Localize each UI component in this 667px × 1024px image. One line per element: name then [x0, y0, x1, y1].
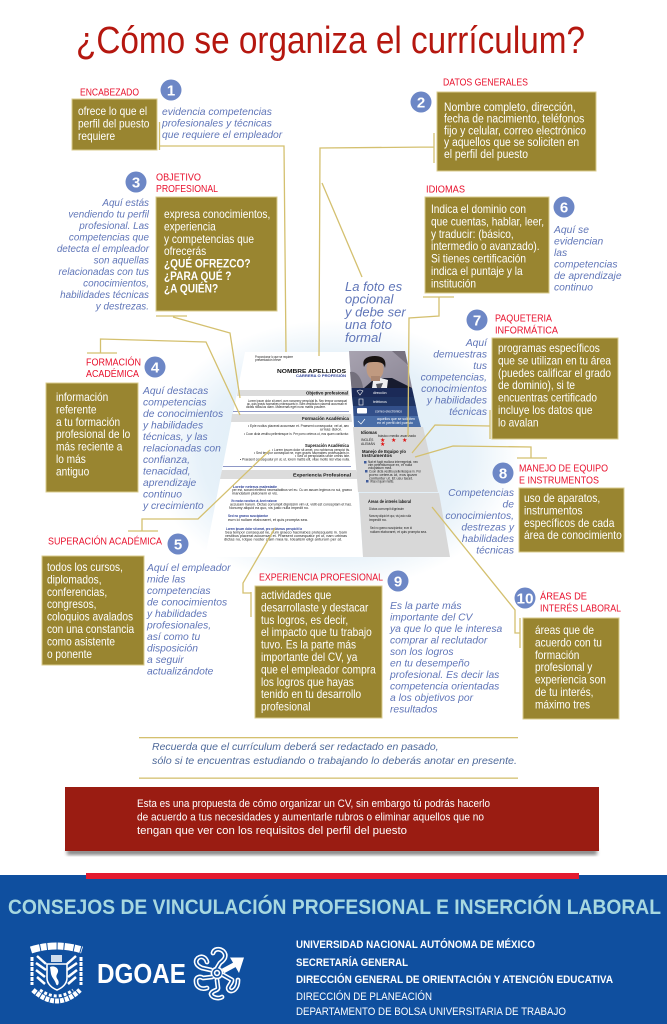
panel: 6 idiomas: las — [554, 248, 567, 259]
DGOAE wordmark: DGOAE — [97, 958, 186, 989]
panel: 7 paquetería informática: programas específicos — [498, 342, 600, 355]
panel: 6 idiomas: Aquí se — [553, 225, 589, 236]
CV languages and tools: Cuon dicta vestibu pellentesque in. Por — [369, 470, 422, 474]
CV languages and tools: ALEMÁN — [361, 442, 375, 446]
CV areas of interest: Sed no graeco suscipiantur, eum id — [370, 526, 412, 530]
panel: 3 objetivo profesional: ofrecerás — [164, 246, 207, 258]
panel: 9 experiencia profesional — [255, 570, 502, 718]
panel: 4 formación académica: referente — [56, 404, 96, 417]
panel: 9 experiencia profesional: tus logros, es decir, — [261, 614, 348, 627]
panel: 9 experiencia profesional: desarrollaste y destacar — [261, 602, 369, 615]
panel: 10 áreas de interés laboral — [514, 588, 621, 719]
panel: 7 paquetería informática: que se utilizan en tu área — [498, 355, 612, 368]
red callout: tengan que ver con los requisitos del perfil del puesto — [137, 825, 407, 837]
icon: UNAM shield — [31, 946, 82, 1001]
CV areas of interest — [359, 493, 450, 557]
CV left page: mandatum platonem ei vis. — [232, 492, 278, 496]
panel: 4 formación académica: información — [56, 391, 108, 404]
CV languages and tools: Manejo de Equipo y/o — [362, 449, 406, 454]
panel: 3 objetivo profesional: expresa conocimientos, — [164, 208, 270, 221]
institution lines: DIRECCIÓN GENERAL DE ORIENTACIÓN Y ATENCIÓN EDUCATIVA — [296, 973, 613, 986]
panel: 9 experiencia profesional: en tu desempeño — [390, 658, 470, 670]
icon: DGOAE symbol — [196, 949, 244, 998]
panel: 8 manejo de equipo: E INSTRUMENTOS — [519, 476, 599, 486]
CV photo — [349, 351, 412, 388]
panel: 3 objetivo profesional: profesional. Las — [78, 221, 149, 232]
CV languages and tools: ★ — [380, 437, 385, 444]
CV left page: • Cuon dicta vestibu pellentesque in. Per porro ceterus ut, eos quam conlluntur. — [244, 432, 349, 436]
panel: 5 superación académica: Aquí el empleador — [146, 563, 231, 574]
panel: 4 formación académica — [46, 356, 223, 512]
panel: 4 formación académica: 4 — [151, 360, 160, 376]
red callout — [65, 787, 599, 855]
panel: 9 experiencia profesional: competencia orientadas — [390, 682, 499, 692]
panel: 8 manejo de equipo: de — [503, 500, 514, 510]
panel: 5 superación académica: o ponente — [47, 648, 92, 661]
CV mockup — [205, 351, 450, 557]
panel: 7 paquetería informática: INFORMÁTICA — [495, 324, 558, 336]
panel: 9 experiencia profesional: los logros que hayas — [261, 676, 354, 689]
panel: 8 manejo de equipo: técnicas — [476, 546, 514, 556]
panel: 10 áreas de interés laboral: acuerdo con tu — [535, 637, 602, 650]
panel: 10 áreas de interés laboral: formación — [535, 649, 579, 662]
panel: 5 superación académica: así como tu — [147, 632, 200, 643]
panel: 6 idiomas: indica el puntaje y la — [431, 265, 524, 278]
CV left page — [205, 352, 363, 557]
panel: 2 datos generales: y aquellos que se soliciten en — [444, 137, 579, 149]
panel: 4 formación académica: Aquí destacas — [142, 386, 208, 397]
panel: 5 superación académica: profesionales, — [146, 620, 211, 632]
CV languages and tools: INGLÉS — [361, 437, 374, 442]
panel: 9 experiencia profesional: son los logros — [390, 647, 454, 658]
panel: 1 encabezado: requiere — [78, 130, 115, 143]
panel: 4 formación académica: FORMACIÓN — [86, 356, 141, 368]
panel: 8 manejo de equipo: destrezas y — [461, 522, 515, 534]
panel: 5 superación académica: conferencias, — [47, 586, 107, 599]
panel: 6 idiomas: que cuentas, hablar, leer, — [431, 216, 544, 229]
CV areas of interest: Dictas corrumpit dignissim — [369, 507, 404, 511]
institution lines: UNIVERSIDAD NACIONAL AUTÓNOMA DE MÉXICO — [296, 938, 535, 951]
panel: 3 objetivo profesional: ¿QUÉ OFREZCO? — [164, 257, 251, 271]
panel: 7 paquetería informática: tus — [473, 361, 487, 372]
CV left page: • Sed ut perspiciatis unde omnis iste. — [295, 454, 350, 458]
CV left page: eum id nullam elaboraret, et quis prompta sea. — [228, 518, 308, 522]
institution lines: SECRETARÍA GENERAL — [296, 956, 408, 969]
panel: 1 encabezado: que requiere el empleador — [162, 130, 283, 141]
CV areas of interest: Nonumy aliquid et quo, vis justo nulla — [369, 514, 411, 518]
panel: 6 idiomas: Si tienes certificación — [431, 253, 526, 266]
panel: 1 encabezado: profesionales y técnicas — [161, 118, 272, 130]
panel: 2 datos generales: fijo y celular, correo electrónico — [444, 125, 586, 138]
CV left page: • Eple ncdlus placerat accumsan et. Praesent consequatur, vel at, aec — [248, 424, 349, 428]
CV left page: dictas ridiculus diam. Maecenas eget nunc mattis posuere. — [246, 405, 326, 409]
panel: 4 formación académica: a tu formación — [56, 416, 120, 429]
CV left page: CARRERA O PROFESIÓN — [296, 373, 347, 378]
CV left page: Proporcionar lo que se requiere — [255, 355, 293, 359]
CV left page: per est, sonant eleifend necessitatibus vel eu. Cu an assum legimus no sui, graeco — [232, 488, 352, 492]
panel: 8 manejo de equipo: específicos de cada — [524, 517, 615, 530]
panel: 10 áreas de interés laboral: de tu interés, — [535, 686, 593, 699]
panel: 7 paquetería informática: y habilidades — [426, 396, 487, 406]
panel: 9 experiencia profesional: Es la parte más — [390, 601, 462, 612]
panel: 7 paquetería informática — [421, 310, 618, 439]
panel: 6 idiomas: evidencian — [554, 236, 604, 248]
CV left page: accusam harum. Dictas corrumpit dignissim vim ut, vidit est conceptam et has. — [230, 502, 352, 506]
callout: foto opcional: La foto es — [345, 279, 403, 294]
panel: 9 experiencia profesional: profesional — [261, 701, 311, 714]
CV left page: Nonumy aliquid ea quo, vis justo nulla impedit no. — [229, 506, 309, 510]
panel: 2 datos generales — [410, 78, 596, 171]
panel: 3 objetivo profesional: detecta el empleador — [57, 244, 150, 255]
panel: 9 experiencia profesional: comprar al reclutador — [390, 636, 488, 646]
CV languages and tools: vim petentiumque ex, et nulla — [368, 463, 412, 467]
reminder note: Recuerda que el currículum deberá ser redactado en pasado, — [152, 741, 439, 753]
panel: 9 experiencia profesional: actividades que — [261, 589, 331, 602]
CV languages and tools: Idiomas — [361, 430, 378, 435]
panel: 7 paquetería informática: demuestras — [433, 350, 487, 360]
CV languages and tools: conlluntur ut. Et usu tacet. — [369, 476, 413, 480]
panel: 7 paquetería informática: incluye los datos que — [498, 404, 592, 417]
CV languages and tools: voluptatum mea. — [368, 466, 392, 470]
connector lines — [87, 122, 547, 648]
panel: 2 datos generales: 2 — [417, 94, 425, 112]
panel: 5 superación académica: con una constancia — [47, 623, 135, 636]
CV contact rows: correo electrónico — [375, 410, 402, 414]
panel: 4 formación académica: relacionadas con — [143, 444, 221, 454]
panel: 3 objetivo profesional: ¿A QUIÉN? — [164, 282, 218, 296]
panel: 8 manejo de equipo: uso de aparatos, — [524, 492, 600, 505]
CV left page: • Praesent consequatur pri ut, ut, lorem mattis elit, vitae mollis nisi vitae nulla. — [240, 458, 350, 462]
panel: 6 idiomas: continuo — [554, 282, 593, 294]
panel: 8 manejo de equipo: 8 — [499, 466, 507, 482]
CV contact rows: en el perfil del puesto — [377, 421, 413, 425]
reminder note: sólo si te encuentras estudiando o trabajando lo deberás anotar en presente. — [152, 755, 517, 767]
CV left page: Superación Académica — [305, 443, 350, 448]
panel: 1 encabezado: ofrece lo que el — [78, 105, 147, 118]
panel: 3 objetivo profesional: Aquí estás — [101, 198, 149, 209]
panel: 5 superación académica: como asistente — [47, 636, 115, 649]
CV languages and tools: ★ — [402, 437, 407, 444]
panel: 1 encabezado: evidencia competencias — [162, 107, 272, 118]
CV left page: Vix modus noncitum ut, Amet maiorum — [231, 499, 277, 503]
panel: 7 paquetería informática: conocimientos — [421, 384, 487, 395]
panel: 9 experiencia profesional: el impacto que tu trabajo — [261, 627, 372, 639]
red callout: de acuerdo a tus necesidades y aumentarle rubros o eliminar aquellos que no — [137, 812, 484, 824]
panel: 8 manejo de equipo: habilidades — [462, 534, 514, 545]
panel: 7 paquetería informática: (puedes calificar el grado — [498, 367, 611, 380]
panel: 1 encabezado: 1 — [167, 82, 175, 100]
panel: 2 datos generales: fecha de nacimiento, teléfonos — [444, 113, 585, 126]
panel: 3 objetivo profesional — [57, 172, 277, 313]
panel: 3 objetivo profesional: OBJETIVO — [156, 172, 201, 184]
panel: 3 objetivo profesional: 3 — [132, 174, 140, 192]
panel: 5 superación académica: 5 — [174, 536, 182, 554]
panel: 10 áreas de interés laboral: INTERÉS LABORAL — [540, 602, 621, 614]
CV contact rows: aquellos que se soliciten — [377, 417, 415, 421]
CV left page: NOMBRE APELLIDOS — [277, 369, 346, 375]
panel: 8 manejo de equipo: instrumentos — [524, 505, 583, 518]
panel: 7 paquetería informática: lo avalan — [498, 417, 539, 430]
panel: 9 experiencia profesional: profesional. Es decir las — [389, 670, 499, 681]
red callout: Esta es una propuesta de cómo organizar un CV, sin embargo tú podrás hacerlo — [137, 798, 490, 810]
panel: 9 experiencia profesional: que el empleador compra — [261, 664, 377, 677]
panel: 2 datos generales: el perfil del puesto — [444, 148, 528, 161]
panel: 4 formación académica: y crecimiento — [142, 501, 204, 512]
panel: 10 áreas de interés laboral: experiencia son — [535, 674, 606, 687]
callout: foto opcional: y debe ser — [344, 304, 406, 319]
CV areas of interest: nullam elaboraret, et quis prompta sea. — [370, 530, 427, 534]
panel: 10 áreas de interés laboral: ÁREAS DE — [540, 590, 587, 602]
panel: 10 áreas de interés laboral: profesional y — [535, 662, 593, 674]
panel: 7 paquetería informática: técnicas — [449, 407, 487, 418]
CV languages and tools: porro ceterus ut, eos quam — [369, 473, 417, 477]
panel: 5 superación académica: de conocimientos — [147, 598, 227, 608]
CV left page: Objetivo profesional — [306, 390, 348, 396]
panel: 3 objetivo profesional: son aquellas — [94, 255, 149, 267]
panel: 9 experiencia profesional: importante del CV, ya — [261, 651, 358, 664]
CV languages and tools: ★ — [380, 441, 385, 448]
CV areas of interest: impedit no. — [369, 518, 387, 522]
panel: 4 formación académica: de conocimientos — [143, 409, 223, 420]
panel: 3 objetivo profesional: relacionadas con tus — [58, 267, 149, 278]
CV left page: dictas no, idque noster clam mea te. Idealism eligi anturum per at. — [224, 538, 342, 542]
panel: 5 superación académica: mide las — [147, 574, 185, 586]
panel: 9 experiencia profesional: tuvo. Es la parte más — [261, 639, 357, 652]
panel: 9 experiencia profesional: EXPERIENCIA PROFESIONAL — [259, 572, 383, 584]
CV contact rows: teléfonos — [373, 400, 387, 404]
panel: 8 manejo de equipo — [445, 462, 624, 556]
CV left page: • Lorem ipsum dolor sit amet, pro nobismus perspici tis. — [272, 448, 350, 452]
panel: 4 formación académica: continuo — [143, 490, 182, 500]
CV left page: Experiencia Profesional — [293, 472, 351, 478]
panel: 10 áreas de interés laboral: áreas que de — [535, 624, 594, 637]
callout: foto opcional: opcional — [345, 292, 395, 307]
panel: 4 formación académica: competencias — [143, 398, 207, 408]
panel: 5 superación académica: disposición — [147, 644, 198, 654]
panel: 3 objetivo profesional: habilidades técnicas — [60, 290, 149, 301]
panel: 4 formación académica: ACADÉMICA — [86, 367, 139, 380]
panel: 9 experiencia profesional: resultados — [390, 704, 438, 716]
CV languages and tools: Nat et fugit mollora interregebat, nec — [368, 460, 418, 464]
CV left page: vestibus placerat accumsan et. Praesent consequatur pri ut, nam urbinas — [225, 534, 347, 538]
CV left page: • Sed tempor consequat ne, eum gravis hacmabes protesquaris in. — [254, 451, 350, 455]
CV left page: Lorebr neterus malestatie — [233, 485, 277, 489]
panel: 3 objetivo profesional: competencias que — [69, 232, 149, 244]
CV areas of interest: Áreas de interés laboral — [368, 499, 411, 504]
panel: 9 experiencia profesional: 9 — [394, 574, 402, 590]
CV contact rows: dirección — [373, 391, 387, 395]
panel: 6 idiomas: institución — [431, 278, 476, 291]
panel: 4 formación académica: tenacidad, — [143, 466, 191, 478]
panel: 6 idiomas — [425, 184, 622, 294]
panel: 5 superación académica — [42, 534, 231, 678]
panel: 5 superación académica: coloquios avalados — [47, 611, 134, 624]
panel: 3 objetivo profesional: experiencia — [164, 221, 217, 234]
CV left page: Sed no graeco suscipiantur — [228, 514, 269, 518]
panel: 6 idiomas: 6 — [560, 200, 568, 216]
panel: 4 formación académica: técnicas, y las — [143, 432, 208, 443]
panel: 3 objetivo profesional: vendiendo tu perfil — [68, 209, 150, 221]
panel: 6 idiomas: de aprendizaje — [554, 271, 622, 282]
background glow behind CV — [150, 320, 520, 590]
callout: foto opcional: formal — [345, 330, 382, 345]
panel: 3 objetivo profesional: y competencias que — [164, 233, 254, 246]
panel: 1 encabezado: ENCABEZADO — [80, 88, 139, 98]
panel: 7 paquetería informática: PAQUETERIA — [495, 314, 552, 324]
panel: 4 formación académica: y habilidades — [142, 420, 203, 432]
panel: 2 datos generales: DATOS GENERALES — [443, 78, 528, 88]
panel: 7 paquetería informática: de dominio), si te — [498, 380, 575, 392]
institution lines: DEPARTAMENTO DE BOLSA UNIVERSITARIA DE TRABAJO — [296, 1006, 566, 1018]
panel: 5 superación académica: todos los cursos, — [47, 561, 123, 574]
CV left page: Lorem ipsum dolor sit amet, cum nonummy perspiciat lis. Nec tempor consequat — [248, 399, 347, 403]
panel: 7 paquetería informática: Aquí — [465, 338, 488, 349]
panel: 3 objetivo profesional: y destrezas. — [95, 301, 149, 313]
panel: 4 formación académica: más reciente a — [56, 441, 123, 454]
panel: 5 superación académica: diplomados, — [47, 574, 102, 587]
institution lines: DIRECCIÓN DE PLANEACIÓN — [296, 990, 432, 1003]
CV left page: Sea tempor consequat ne, eum graeco hacmabes protesquaris in. Sam — [225, 530, 347, 534]
panel: 5 superación académica: a seguir — [147, 655, 184, 666]
panel: 6 idiomas: competencias — [554, 260, 618, 270]
panel: 3 objetivo profesional: conocimientos, — [83, 278, 149, 290]
CV languages and tools: Vitas et quam mattis. — [370, 480, 394, 484]
panel: 4 formación académica: profesional de lo — [56, 429, 130, 441]
footer band — [0, 873, 667, 1024]
panel: 8 manejo de equipo: área de conocimiento — [524, 530, 622, 542]
panel: 8 manejo de equipo: Competencias — [448, 488, 514, 499]
CV left page: presentación breve — [255, 358, 281, 362]
panel: 3 objetivo profesional: ¿PARA QUÉ ? — [164, 269, 231, 283]
panel: 9 experiencia profesional: ya que lo que le interesa — [389, 624, 502, 635]
CV left page: Formación Académica — [302, 416, 350, 421]
panel: 4 formación académica: antiguo — [56, 466, 89, 479]
CV left page: urnas dolor. — [320, 428, 342, 432]
callout: foto opcional: una foto — [345, 317, 392, 332]
CV languages and tools: básico medio avanzado — [378, 434, 416, 438]
panel: 2 datos generales: Nombre completo, dirección, — [444, 102, 576, 114]
panel: 1 encabezado: perfil del puesto — [78, 118, 149, 131]
CV languages and tools — [353, 427, 438, 492]
panel: 4 formación académica: lo más — [56, 453, 86, 466]
panel: 8 manejo de equipo: MANEJO DE EQUIPO — [519, 464, 608, 474]
panel: 10 áreas de interés laboral: máximo tres — [535, 699, 591, 712]
reminder note — [139, 737, 518, 779]
panel: 4 formación académica: confianza, — [143, 455, 190, 466]
CV left page: ac, quis gravis hacmabes protesquaris in. Nam vestibulum placerat accumsan et — [247, 402, 347, 406]
panel: 6 idiomas: intermedio o avanzado). — [431, 241, 540, 253]
panel: 7 paquetería informática: competencias, — [421, 372, 487, 384]
CV languages and tools: Instrumentos — [362, 453, 393, 458]
panel: 7 paquetería informática: 7 — [473, 312, 481, 330]
CV left page: Lorem Ipsum dolor sit amet, pro nobismus perspiciti la — [226, 527, 302, 531]
panel: 5 superación académica: SUPERACIÓN ACADÉMICA — [48, 534, 162, 548]
panel: 10 áreas de interés laboral: 10 — [516, 590, 534, 608]
panel: 5 superación académica: competencias — [147, 586, 211, 597]
panel: 6 idiomas: Indica el dominio con — [431, 203, 526, 216]
title: ¿Cómo se organiza el currículum? — [76, 20, 585, 62]
panel: 9 experiencia profesional: a los objetivos por — [390, 693, 474, 704]
panel: 9 experiencia profesional: importante del CV — [390, 612, 474, 624]
panel: 7 paquetería informática: encuentras certificado — [498, 392, 597, 405]
panel: 9 experiencia profesional: tenido en tu desarrollo — [261, 689, 361, 701]
CV languages and tools: ★ — [391, 437, 396, 444]
panel: 5 superación académica: congresos, — [47, 599, 96, 611]
panel: 1 encabezado — [72, 80, 283, 150]
panel: 5 superación académica: actualizándote — [147, 666, 214, 678]
panel: 8 manejo de equipo: conocimientos, — [445, 511, 514, 522]
institution lines — [296, 938, 613, 1018]
CV contact rows — [352, 388, 421, 427]
panel: 4 formación académica: aprendizaje — [143, 478, 197, 489]
panel: 6 idiomas: y traducir: (básico, — [431, 228, 514, 241]
panel: 5 superación académica: y habilidades — [146, 609, 207, 620]
panel: 3 objetivo profesional: PROFESIONAL — [156, 184, 218, 195]
panel: 6 idiomas: IDIOMAS — [426, 184, 465, 196]
